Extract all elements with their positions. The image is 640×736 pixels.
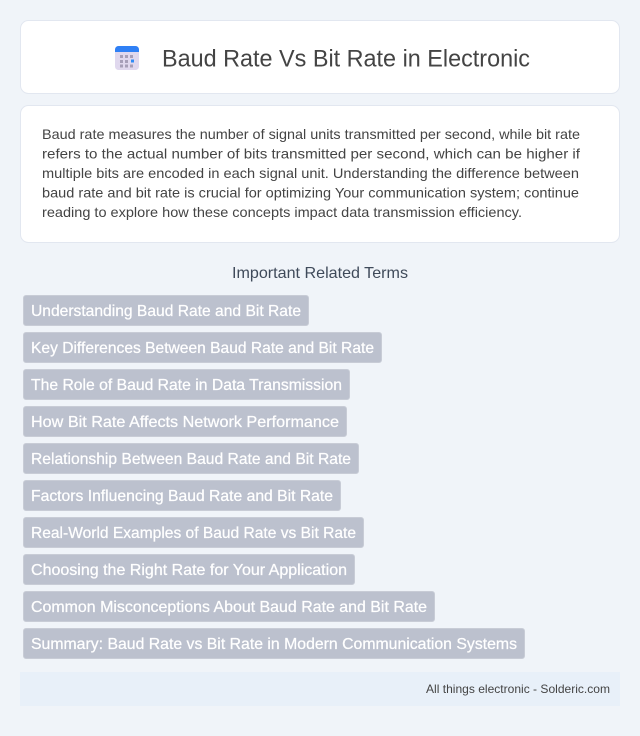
chip 2 [24, 332, 382, 362]
footer: All things electronic - Solderic.com [426, 682, 610, 696]
chip 10: Summary: Baud Rate vs Bit Rate in Modern Communication Systems [31, 636, 517, 653]
chip 8 [24, 554, 354, 584]
chip 3: The Role of Baud Rate in Data Transmission [31, 377, 342, 394]
chip 9 [24, 592, 434, 622]
chip 10 [24, 628, 524, 658]
panel: title card [20, 20, 620, 94]
chip 8: Choosing the Right Rate for Your Application [31, 562, 347, 579]
chip 6: Factors Influencing Baud Rate and Bit Rate [31, 488, 333, 505]
text block: description: multiple bits are encoded in each signal unit. Understanding the difference between [42, 165, 579, 181]
chip 6 [24, 480, 340, 510]
chip 4 [24, 406, 346, 436]
chip 5 [24, 444, 358, 474]
text block: description [42, 126, 580, 220]
footer [20, 672, 620, 706]
chip 3 [24, 370, 350, 400]
title: Baud Rate Vs Bit Rate in Electronic [162, 46, 530, 72]
chip 9: Common Misconceptions About Baud Rate and Bit Rate [31, 599, 427, 616]
chip 1: Understanding Baud Rate and Bit Rate [31, 303, 301, 320]
text block: description: baud rate and bit rate is crucial for optimizing Your communication system; continue [42, 184, 579, 200]
text block: description: reading to explore how these concepts impact data transmission efficiency. [42, 204, 522, 220]
chip 5: Relationship Between Baud Rate and Bit Rate [31, 451, 351, 468]
list: related terms [24, 296, 524, 658]
text block: description: Baud rate measures the number of signal units transmitted per second, while bit rate [42, 126, 580, 142]
chip 2: Key Differences Between Baud Rate and Bit Rate [31, 340, 374, 357]
icon: calendar [115, 46, 139, 70]
chip 7: Real-World Examples of Baud Rate vs Bit Rate [31, 525, 356, 542]
chip 7 [24, 518, 364, 548]
chip 1 [24, 296, 308, 326]
chip 4: How Bit Rate Affects Network Performance [31, 414, 339, 431]
panel: description [20, 106, 620, 242]
text block: description: refers to the actual number of bits transmitted per second, which can be higher if [42, 146, 580, 162]
heading: related terms: Important Related Terms [232, 265, 408, 282]
